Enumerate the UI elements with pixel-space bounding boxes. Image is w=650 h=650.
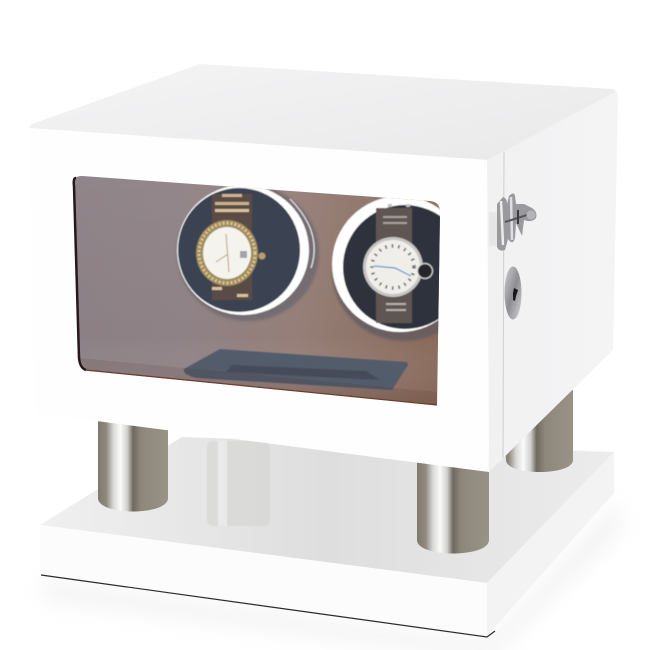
cabinet side face [487,92,618,472]
back-left leg reflection [207,441,270,526]
cabinet front face [29,128,489,472]
right watch dial [366,240,420,294]
left winder [177,185,319,321]
chrome latch [497,194,536,251]
left watch case [258,252,266,260]
right ring shadow [331,270,438,342]
window bottom edge [86,370,437,405]
cabinet hinge block [489,212,503,246]
left watch strap [212,194,252,300]
right watch strap [376,204,412,323]
accessory tray [184,349,408,390]
base bottom edge [41,575,495,637]
cabinet [29,64,618,472]
right winder [331,198,440,342]
cabinet top face [29,64,616,160]
floor shadow [42,500,622,650]
left watch dial [203,227,251,279]
right watch crown [418,264,432,278]
base plinth [40,437,614,637]
left ring thin outer highlight [290,199,314,268]
key lock plate [504,266,522,320]
keyhole [513,288,518,301]
right watch hands [374,266,411,276]
display window [75,176,440,404]
door seam [503,152,504,458]
base top surface [40,437,614,583]
back right leg [500,390,573,472]
left ring [177,185,309,315]
base right face [487,452,614,636]
right ring [331,198,440,333]
window backing [70,170,445,410]
window left dark edge [74,178,86,370]
left ring shadow [177,185,319,321]
right watch case [363,237,423,297]
window lower glow [80,358,432,400]
front right leg [417,460,489,554]
front left leg [98,420,168,512]
base front face [40,525,487,636]
